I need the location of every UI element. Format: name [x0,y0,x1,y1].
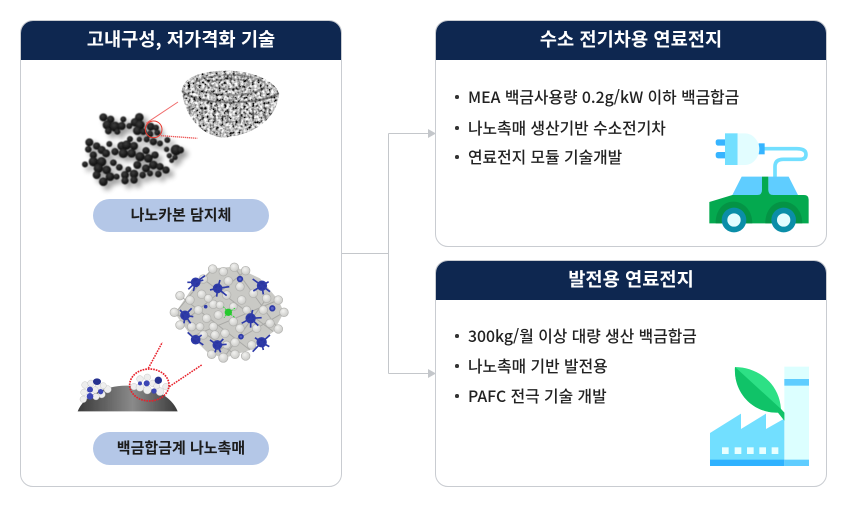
text block: power generation features: PAFC 전극 기술 개발 [468,384,607,407]
label: platinum alloy nanocatalyst [93,432,269,465]
text block: hydrogen vehicle features: 연료전지 모듈 기술개발 [468,145,622,168]
label: carbon support: 나노카본 담지체 [131,204,231,225]
heading: power generation fuel cell: 발전용 연료전지 [568,265,694,292]
panel: domestic composition [20,20,342,487]
heading: domestic composition: 고내구성, 저가격화 기술 [87,25,275,52]
panel: power generation fuel cell [435,260,827,487]
text block: hydrogen vehicle features [455,85,739,168]
heading: domestic composition [20,20,342,60]
label: platinum alloy nanocatalyst: 백금합금계 나노촉매 [117,437,245,458]
text block: power generation features: 300kg/월 이상 대량 생산 백금합금 [468,324,697,347]
heading: hydrogen vehicle fuel cell: 수소 전기차용 연료전지 [540,25,722,52]
text block: hydrogen vehicle features: 나노촉매 생산기반 수소전기차 [468,116,666,139]
label: carbon support [93,199,269,232]
heading: power generation fuel cell [435,260,827,300]
text block: power generation features: 나노촉매 기반 발전용 [468,354,608,377]
text block: power generation features [455,324,697,407]
panel: hydrogen vehicle fuel cell [435,20,827,247]
text block: hydrogen vehicle features: MEA 백금사용량 0.2g/kW 이하 백금합금 [468,85,739,108]
heading: hydrogen vehicle fuel cell [435,20,827,60]
